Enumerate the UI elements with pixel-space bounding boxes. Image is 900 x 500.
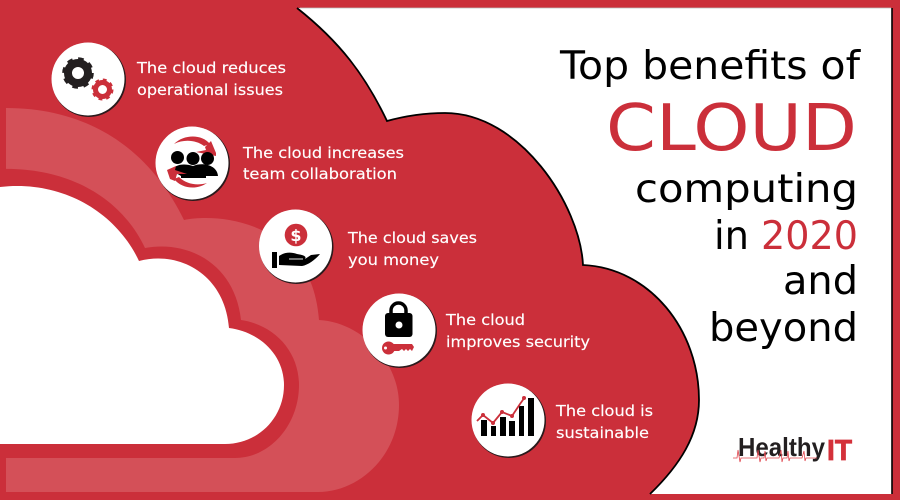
logo: HealthyIT: IT <box>827 435 852 467</box>
item 3: saves money <box>259 210 477 284</box>
item 2: team collaboration <box>156 126 404 201</box>
text: saves you money: The cloud saves <box>347 229 477 247</box>
item 5: sustainable <box>472 384 653 458</box>
icon: hand holding coin <box>259 210 334 284</box>
text: saves you money <box>347 229 477 269</box>
title heading: in <box>714 214 749 259</box>
item 4: improves security <box>362 294 590 368</box>
icon: gears <box>52 42 126 117</box>
text: improves security: The cloud <box>445 311 525 329</box>
icon: hand holding coin: $ <box>290 226 302 245</box>
text: reduces operational issues: operational issues <box>137 81 283 99</box>
title heading <box>559 44 861 351</box>
title heading: 2020 <box>761 214 858 259</box>
text: saves you money: you money <box>348 251 439 269</box>
text: sustainable <box>555 402 653 442</box>
logo: HealthyIT <box>733 432 852 467</box>
text: increases team collaboration: The cloud increases <box>242 144 404 162</box>
decorative layered cloud <box>0 108 399 492</box>
icon: bar chart with trend line <box>472 384 546 458</box>
logo: HealthyIT: Healthy <box>738 432 825 462</box>
white title panel <box>297 8 892 494</box>
text: increases team collaboration <box>242 144 404 183</box>
text: improves security <box>445 311 590 351</box>
text: sustainable: sustainable <box>556 424 649 442</box>
text: increases team collaboration: team collaboration <box>243 165 397 183</box>
icon: team with arrows <box>156 126 230 201</box>
title heading: CLOUD <box>606 92 857 166</box>
title heading: Top benefits of <box>559 44 861 89</box>
title heading: and <box>783 259 858 304</box>
title heading: beyond <box>709 306 858 351</box>
text: improves security: improves security <box>446 333 590 351</box>
item 1: operational issues <box>52 42 286 117</box>
text: sustainable: The cloud is <box>555 402 653 420</box>
title heading: computing <box>635 167 858 212</box>
text: reduces operational issues <box>136 59 286 99</box>
icon: padlock and key <box>362 294 437 368</box>
text: reduces operational issues: The cloud reduces <box>136 59 286 77</box>
